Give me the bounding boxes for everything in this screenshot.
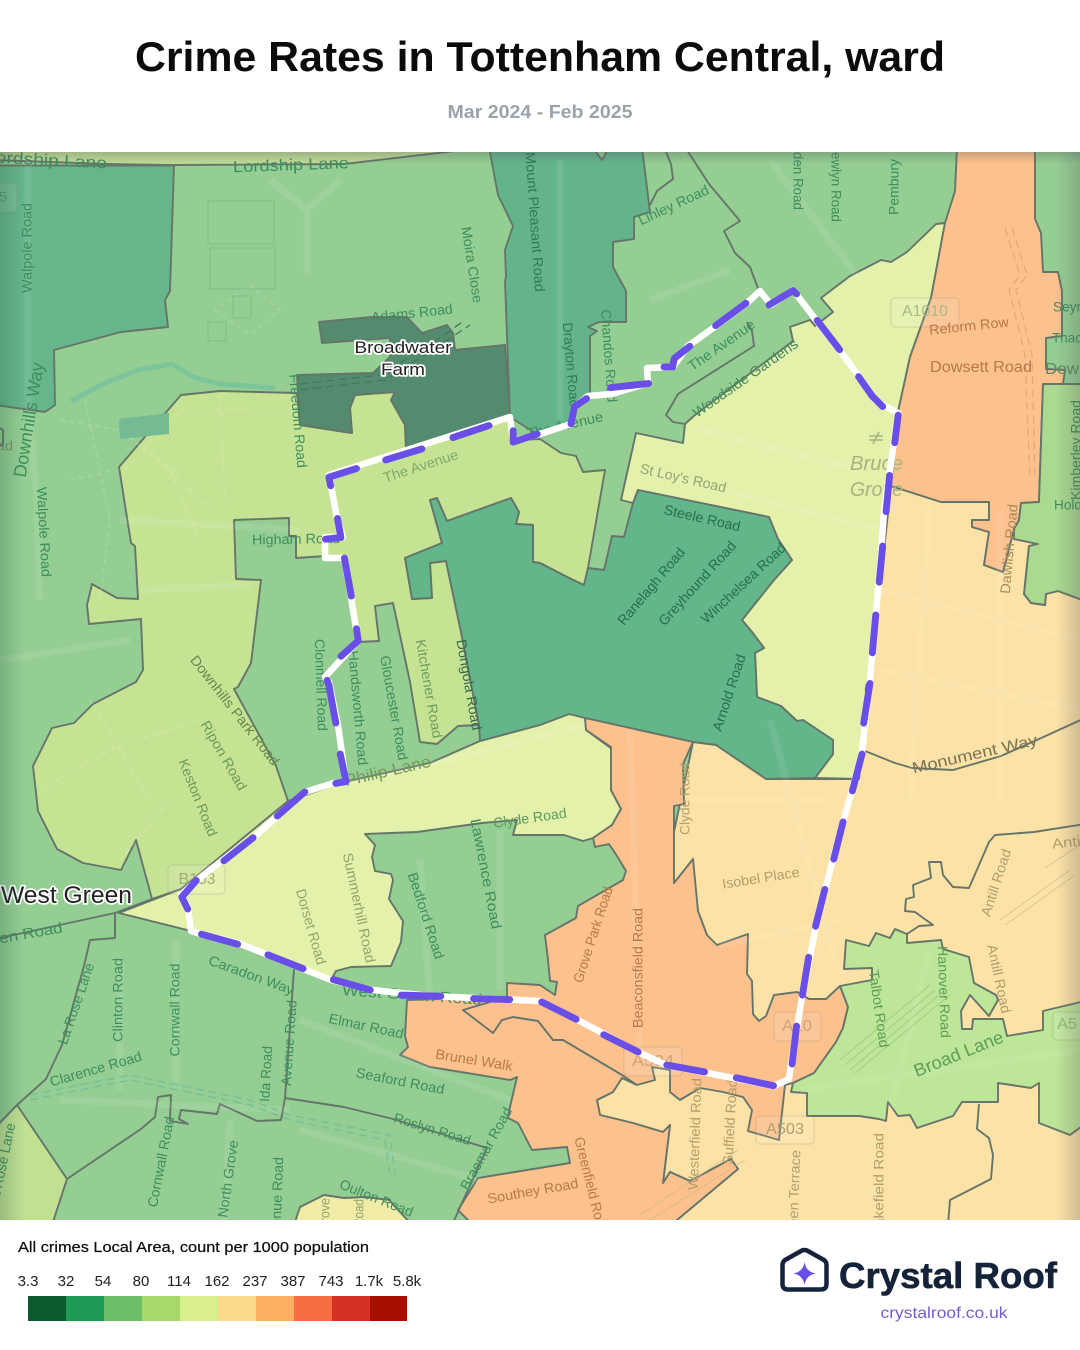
road labels on green: Oulton Road: [337, 1176, 416, 1220]
road labels on orange: A504: [632, 1053, 674, 1070]
road labels on green: Downhills Way: [10, 361, 48, 479]
legend tick labels: 32: [58, 1273, 74, 1290]
road labels on green: Walpole Road: [34, 487, 55, 577]
icon: house with star: [782, 1250, 826, 1290]
road labels on green: Freedom Road: [286, 373, 310, 468]
road labels on green: Avenue Road: [267, 1157, 286, 1243]
map base area: [0, 152, 1080, 1220]
road labels on green: The Avenue: [525, 408, 605, 441]
legend tick labels: 54: [95, 1273, 111, 1290]
road labels on peach: Wakefield Road: [871, 1133, 887, 1241]
road labels on green: Woodside Gardens: [689, 336, 801, 420]
road labels on green: Avenue Road: [278, 999, 300, 1086]
legend tick labels: 114: [167, 1273, 191, 1290]
title: Crime Rates in Tottenham Central, ward: [135, 33, 945, 80]
road labels on green: Elmar Road: [327, 1010, 405, 1041]
road labels on dark green: [614, 501, 789, 733]
road labels on dark green: Arnold Road: [709, 652, 749, 733]
railway hatch lines: [840, 985, 950, 1073]
road labels on peach: [660, 732, 1080, 1246]
road labels on orange: Reform Row: [928, 313, 1010, 338]
road labels on green: West Green Road: [342, 982, 482, 1009]
icon: railway station: [869, 432, 883, 444]
road labels on orange: A10: [782, 1018, 812, 1035]
road labels on orange: Beaconsfield Road: [630, 908, 646, 1028]
road labels on pale yellow: St Loy's Road: [639, 460, 728, 495]
road labels on green: Chandos Road: [598, 309, 621, 403]
legend tick labels: 3.3: [18, 1273, 38, 1290]
road labels on pale yellow: Summerhill Road: [340, 851, 379, 964]
road labels on green: Keston Road: [175, 757, 221, 839]
legend tick labels: 387: [280, 1273, 306, 1290]
road labels on peach: A5: [1057, 1016, 1077, 1033]
road labels on dark green: Ranelagh Road: [614, 544, 688, 628]
road labels on green: Moira Close: [458, 226, 486, 304]
logo: Crystal Roof: [782, 1250, 1058, 1322]
road labels on green: Higham Road: [252, 530, 340, 547]
road labels on green: Drayton Road: [560, 322, 583, 408]
road labels on green: Talbot Road: [866, 969, 893, 1049]
legend tick labels: 80: [133, 1273, 149, 1290]
wordmark: Crystal Roof: [839, 1255, 1058, 1296]
road labels on green: Broad Lane: [911, 1027, 1006, 1081]
road labels on green: Clonmell Road: [312, 639, 331, 731]
bruce grove station label: Grove: [850, 479, 903, 501]
legend tick labels: 237: [242, 1273, 268, 1290]
road labels on orange: Brunel Walk: [434, 1046, 515, 1074]
road labels on orange: Dowsett Road: [930, 359, 1032, 376]
road labels on green: Dongola Road: [453, 638, 485, 731]
subtle road network: [0, 160, 1080, 1220]
legend tick labels: 743: [318, 1273, 344, 1290]
legend tick labels: 162: [204, 1273, 230, 1290]
road labels on green: Ripon Road: [198, 718, 251, 793]
road labels on green: The Avenue: [685, 316, 758, 374]
road labels on green: Lawrence Road: [467, 817, 504, 930]
road labels on orange: Dow: [1045, 361, 1080, 378]
road labels on green: Linley Road: [636, 182, 711, 228]
road labels on pale yellow: Philip Lane: [343, 753, 433, 790]
zone boundary lines: [0, 147, 1080, 1225]
road labels on green: Cornwall Road: [167, 964, 183, 1056]
road labels on green: Lordship Lane: [233, 155, 349, 176]
road labels on green: Ida Road: [256, 1046, 275, 1102]
place label: Broadwater Farm: Broadwater: [354, 338, 452, 357]
road labels on green: Walpole Road: [19, 203, 35, 293]
road labels on dark green: Winchelsea Road: [697, 540, 789, 626]
road labels on green: Clarence Road: [48, 1048, 144, 1090]
road labels on green: Roslyn Road: [392, 1109, 473, 1148]
road labels on peach: A503: [766, 1121, 804, 1138]
road labels on green: La Rose Lane: [54, 961, 97, 1046]
road labels on orange: Greenfield Road: [571, 1135, 611, 1236]
road labels on pale yellow: B153: [178, 871, 216, 888]
subtitle: date range: Mar 2024 - Feb 2025: [448, 102, 632, 122]
road labels on pale yellow: [178, 303, 948, 1232]
legend tick labels: 5.8k: [393, 1273, 422, 1290]
park footpaths: [40, 285, 290, 860]
road labels on green: Downhills Park Road: [187, 652, 283, 768]
road labels on peach: Westerfield Road: [685, 1078, 705, 1190]
road labels on green: ewlyn Road: [828, 152, 844, 222]
road labels on peach: Monument Way: [911, 732, 1039, 777]
road labels on orange: Southey Road: [486, 1175, 579, 1207]
road labels on green: Adams Road: [370, 300, 453, 325]
road labels on green: Gloucester Road: [377, 654, 411, 761]
road labels on peach: Suffield Road: [719, 1079, 740, 1165]
road labels on green: Seaford Road: [355, 1064, 446, 1097]
legend title: All crimes Local Area, count per 1000 population: [18, 1240, 369, 1256]
road labels on green: Mount Pleasant Road: [522, 152, 548, 292]
ward boundary: white line: [181, 290, 898, 1086]
road labels on green: Cornwall Road: [144, 1115, 177, 1208]
map edge shading: [0, 152, 1080, 1220]
choropleth zones: [0, 147, 1080, 1225]
road labels on pale yellow: Clyde Road: [492, 805, 568, 831]
bruce grove station label: Bruce: [850, 453, 903, 475]
road labels on dark green: Steele Road: [662, 501, 742, 534]
legend tick labels: [18, 1273, 422, 1290]
road labels on green: Bedford Road: [405, 870, 448, 961]
road labels on pale yellow: Road: [351, 1199, 367, 1227]
road labels on peach: Antill Road: [984, 943, 1014, 1015]
road labels on green: The Avenue: [381, 446, 460, 485]
road labels on green: Caradon Way: [206, 952, 296, 998]
website: crystalroof.co.uk: [880, 1305, 1009, 1322]
ward boundary: purple dashes: [182, 291, 898, 1086]
place label: West Green: West Green: [1, 882, 132, 909]
road labels on green: Clinton Road: [110, 958, 126, 1042]
road labels on green: Kitchener Road: [413, 638, 446, 739]
road labels on peach: Seven Sisters: [660, 1217, 764, 1236]
place label: Broadwater Farm: Farm: [381, 360, 425, 379]
road labels on pale yellow: Dorset Road: [293, 887, 330, 966]
railway dashes: [30, 228, 1035, 1175]
road labels on green: den Road: [790, 152, 806, 210]
road sign plates: [0, 183, 1080, 1144]
place label: Broadwater Farm: [354, 338, 452, 379]
road labels on green: Handsworth Road: [345, 650, 371, 766]
road labels on dark green: Greyhound Road: [655, 538, 739, 629]
sports pitches: [208, 201, 275, 341]
legend tick labels: 1.7k: [355, 1273, 384, 1290]
road labels on peach: Antill Road: [977, 847, 1014, 918]
road labels on orange: [434, 313, 1080, 1236]
bruce grove station label: [850, 456, 902, 496]
road labels on peach: Clyde Road: [677, 763, 693, 835]
road labels on orange: Dawlish Road: [997, 503, 1021, 594]
road labels on peach: Queen Terrace: [784, 1149, 803, 1246]
road labels on orange: Grove Park Road: [570, 885, 616, 985]
road labels on pale yellow: A1010: [902, 303, 948, 320]
road labels on green: Hanover Road: [935, 946, 954, 1038]
road labels on green: Braemar Road: [457, 1104, 515, 1192]
legend colour scale: [28, 1296, 407, 1321]
road labels on pale yellow: Grove: [317, 1198, 333, 1232]
road labels on green: North Grove: [214, 1139, 241, 1219]
road labels on peach: Isobel Place: [721, 864, 801, 892]
road labels on green: Pembury: [886, 159, 902, 215]
legend: [18, 1240, 422, 1321]
stream and pond: [71, 364, 275, 439]
